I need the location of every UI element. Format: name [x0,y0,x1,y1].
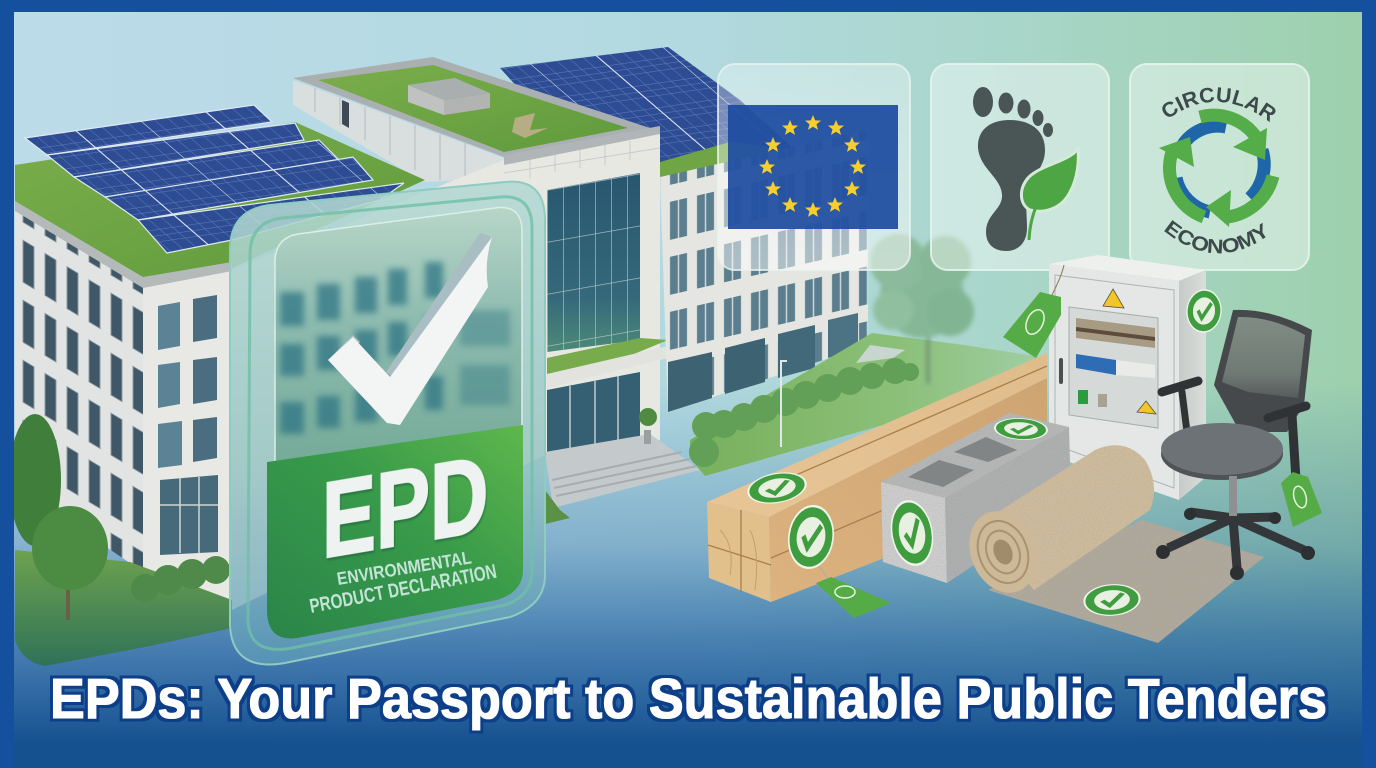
entrance plaza and steps [545,408,700,524]
EPD sticker: beam side [785,503,837,571]
right lawn, hedge and lamp [689,333,1047,476]
inner panel with breakers [1069,307,1158,428]
EU flag [728,105,898,229]
glass EPD certificate card [230,182,545,664]
solar array: left roof [25,105,404,253]
icon: leaf [1021,149,1078,240]
product: wooden beam [707,353,1047,602]
icon: footprint [973,87,1053,251]
roll body [978,445,1154,590]
chair base [1156,476,1315,580]
carpet sheet [988,520,1264,643]
label: economy: ECONOMY [1164,220,1266,254]
product: carpet roll [958,445,1264,643]
product: concrete block [881,413,1071,583]
chair back [1214,310,1312,432]
EPD sticker: carpet [1083,583,1141,617]
icon panel: circular economy [1129,63,1310,271]
product: electrical cabinet [1049,255,1206,500]
left lawn, trees and bushes [9,414,232,666]
icon panel: carbon footprint [931,64,1109,270]
right wing [660,130,868,412]
solar array: rear roof [500,47,795,172]
central block and atrium [232,126,668,610]
green leaf tag: chair [1281,472,1322,527]
icon: recycling arrows [1159,115,1273,227]
illustration: green office building [9,47,1047,666]
caption line one: ENVIRONMENTAL [335,547,473,589]
icon panel: EU flag [718,64,910,270]
product: office chair [1156,310,1315,580]
EPD sticker: cabinet [1185,289,1223,333]
left wing facades [15,201,232,605]
green leaf tag: beam [810,560,891,618]
chair arms [1162,381,1306,480]
green EPD band [267,425,523,638]
EPD letters: EPD [322,432,488,581]
icon: check mark [328,233,492,425]
caption line two: PRODUCT DECLARATION [308,561,499,618]
blurred windows [280,262,510,434]
label: circular: CIRCULAR [1162,87,1276,122]
background tree [870,234,974,384]
roll end [958,501,1048,603]
frosted inner pane [275,208,522,470]
EPD sticker: beam top [746,469,808,507]
green leaf tag: cabinet [1003,265,1064,358]
chair seat [1161,423,1283,480]
EPD sticker: block top [994,417,1048,441]
warning signs [1103,289,1156,414]
upper roof block [293,57,650,182]
EPD sticker: block face [887,498,937,568]
glass outer frame [230,182,545,664]
left wing roof garden [15,122,425,279]
